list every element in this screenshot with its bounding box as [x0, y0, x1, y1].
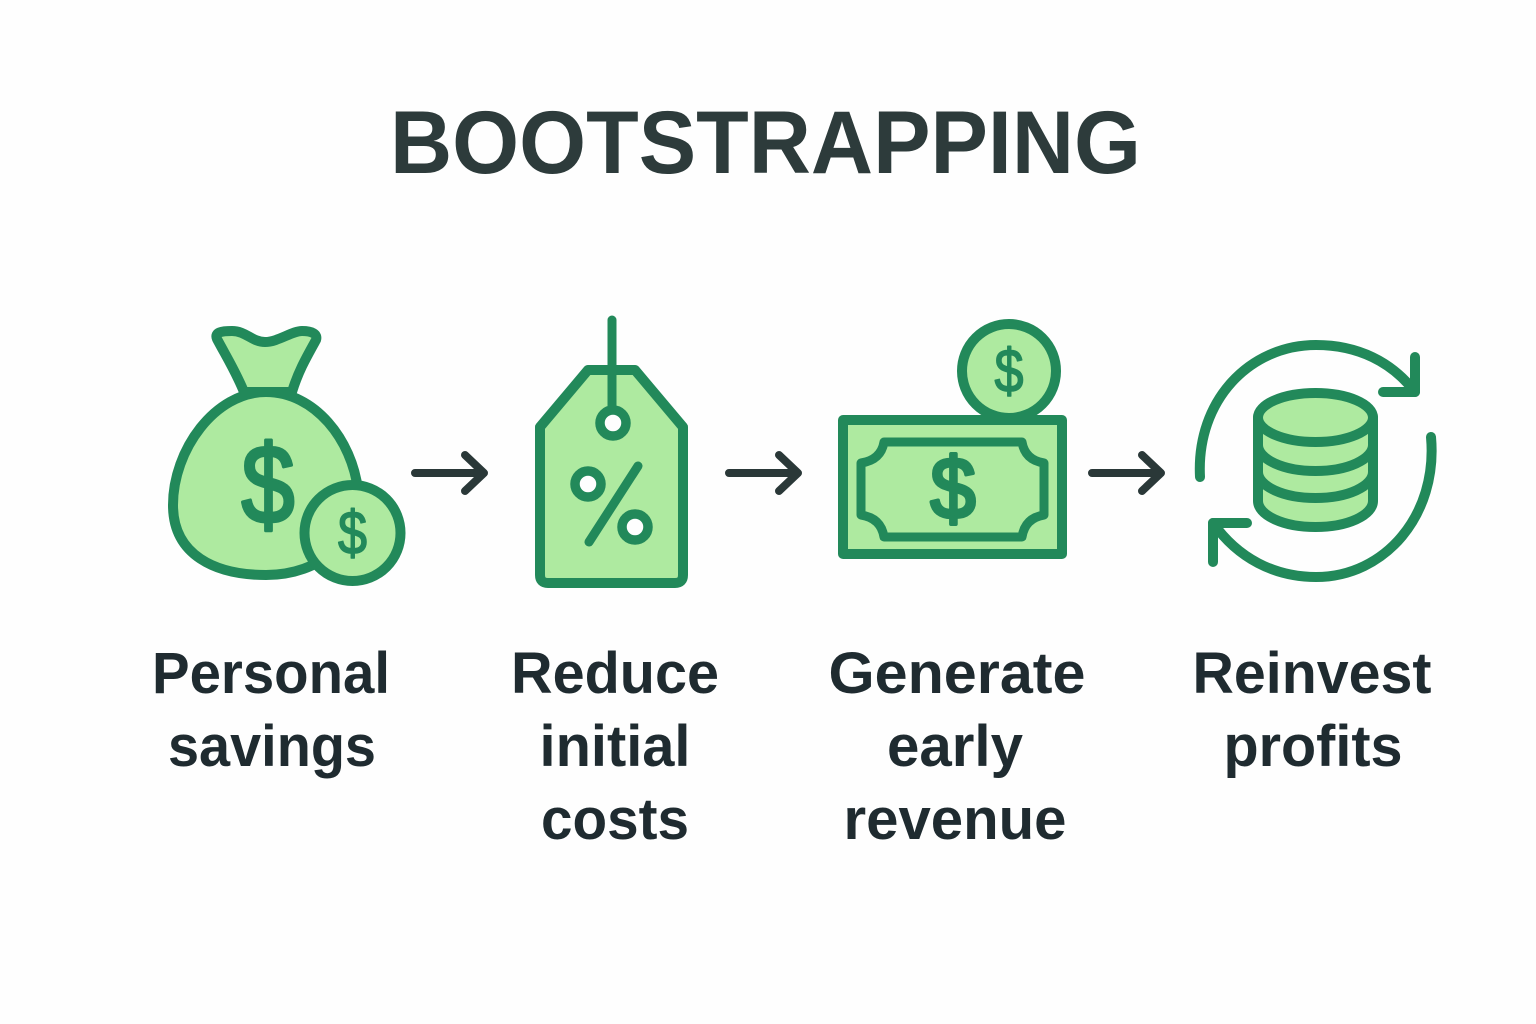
label: reinvest profits: profits	[1224, 714, 1402, 779]
icon: money bag with coin	[173, 331, 400, 581]
label: generate early revenue	[828, 641, 1086, 852]
label: reinvest profits	[1192, 641, 1432, 779]
icon: money bag with coin: $	[338, 499, 367, 567]
arrow 2	[729, 455, 798, 491]
title: BOOTSTRAPPING	[390, 92, 1141, 192]
icon: price tag with percent	[540, 320, 683, 583]
icon: banknote with coin: $	[994, 337, 1024, 405]
label: reduce initial costs	[511, 641, 719, 852]
arrow 1	[415, 455, 484, 491]
label: personal savings	[152, 641, 390, 779]
label: reduce initial costs: costs	[541, 787, 689, 852]
icon: banknote with coin: $	[930, 441, 976, 537]
label: personal savings: savings	[168, 714, 376, 779]
icon: coin stack with circular arrows	[1200, 345, 1432, 577]
label: reduce initial costs: initial	[540, 714, 690, 779]
icon: banknote with coin	[843, 324, 1062, 554]
arrow 3	[1092, 455, 1161, 491]
icon: money bag with coin: $	[242, 423, 294, 547]
label: reduce initial costs: Reduce	[511, 641, 719, 706]
label: generate early revenue: early	[887, 714, 1023, 779]
label: personal savings: Personal	[152, 641, 390, 706]
label: generate early revenue: revenue	[844, 787, 1066, 852]
label: generate early revenue: Generate	[828, 641, 1086, 706]
label: reinvest profits: Reinvest	[1192, 641, 1432, 706]
